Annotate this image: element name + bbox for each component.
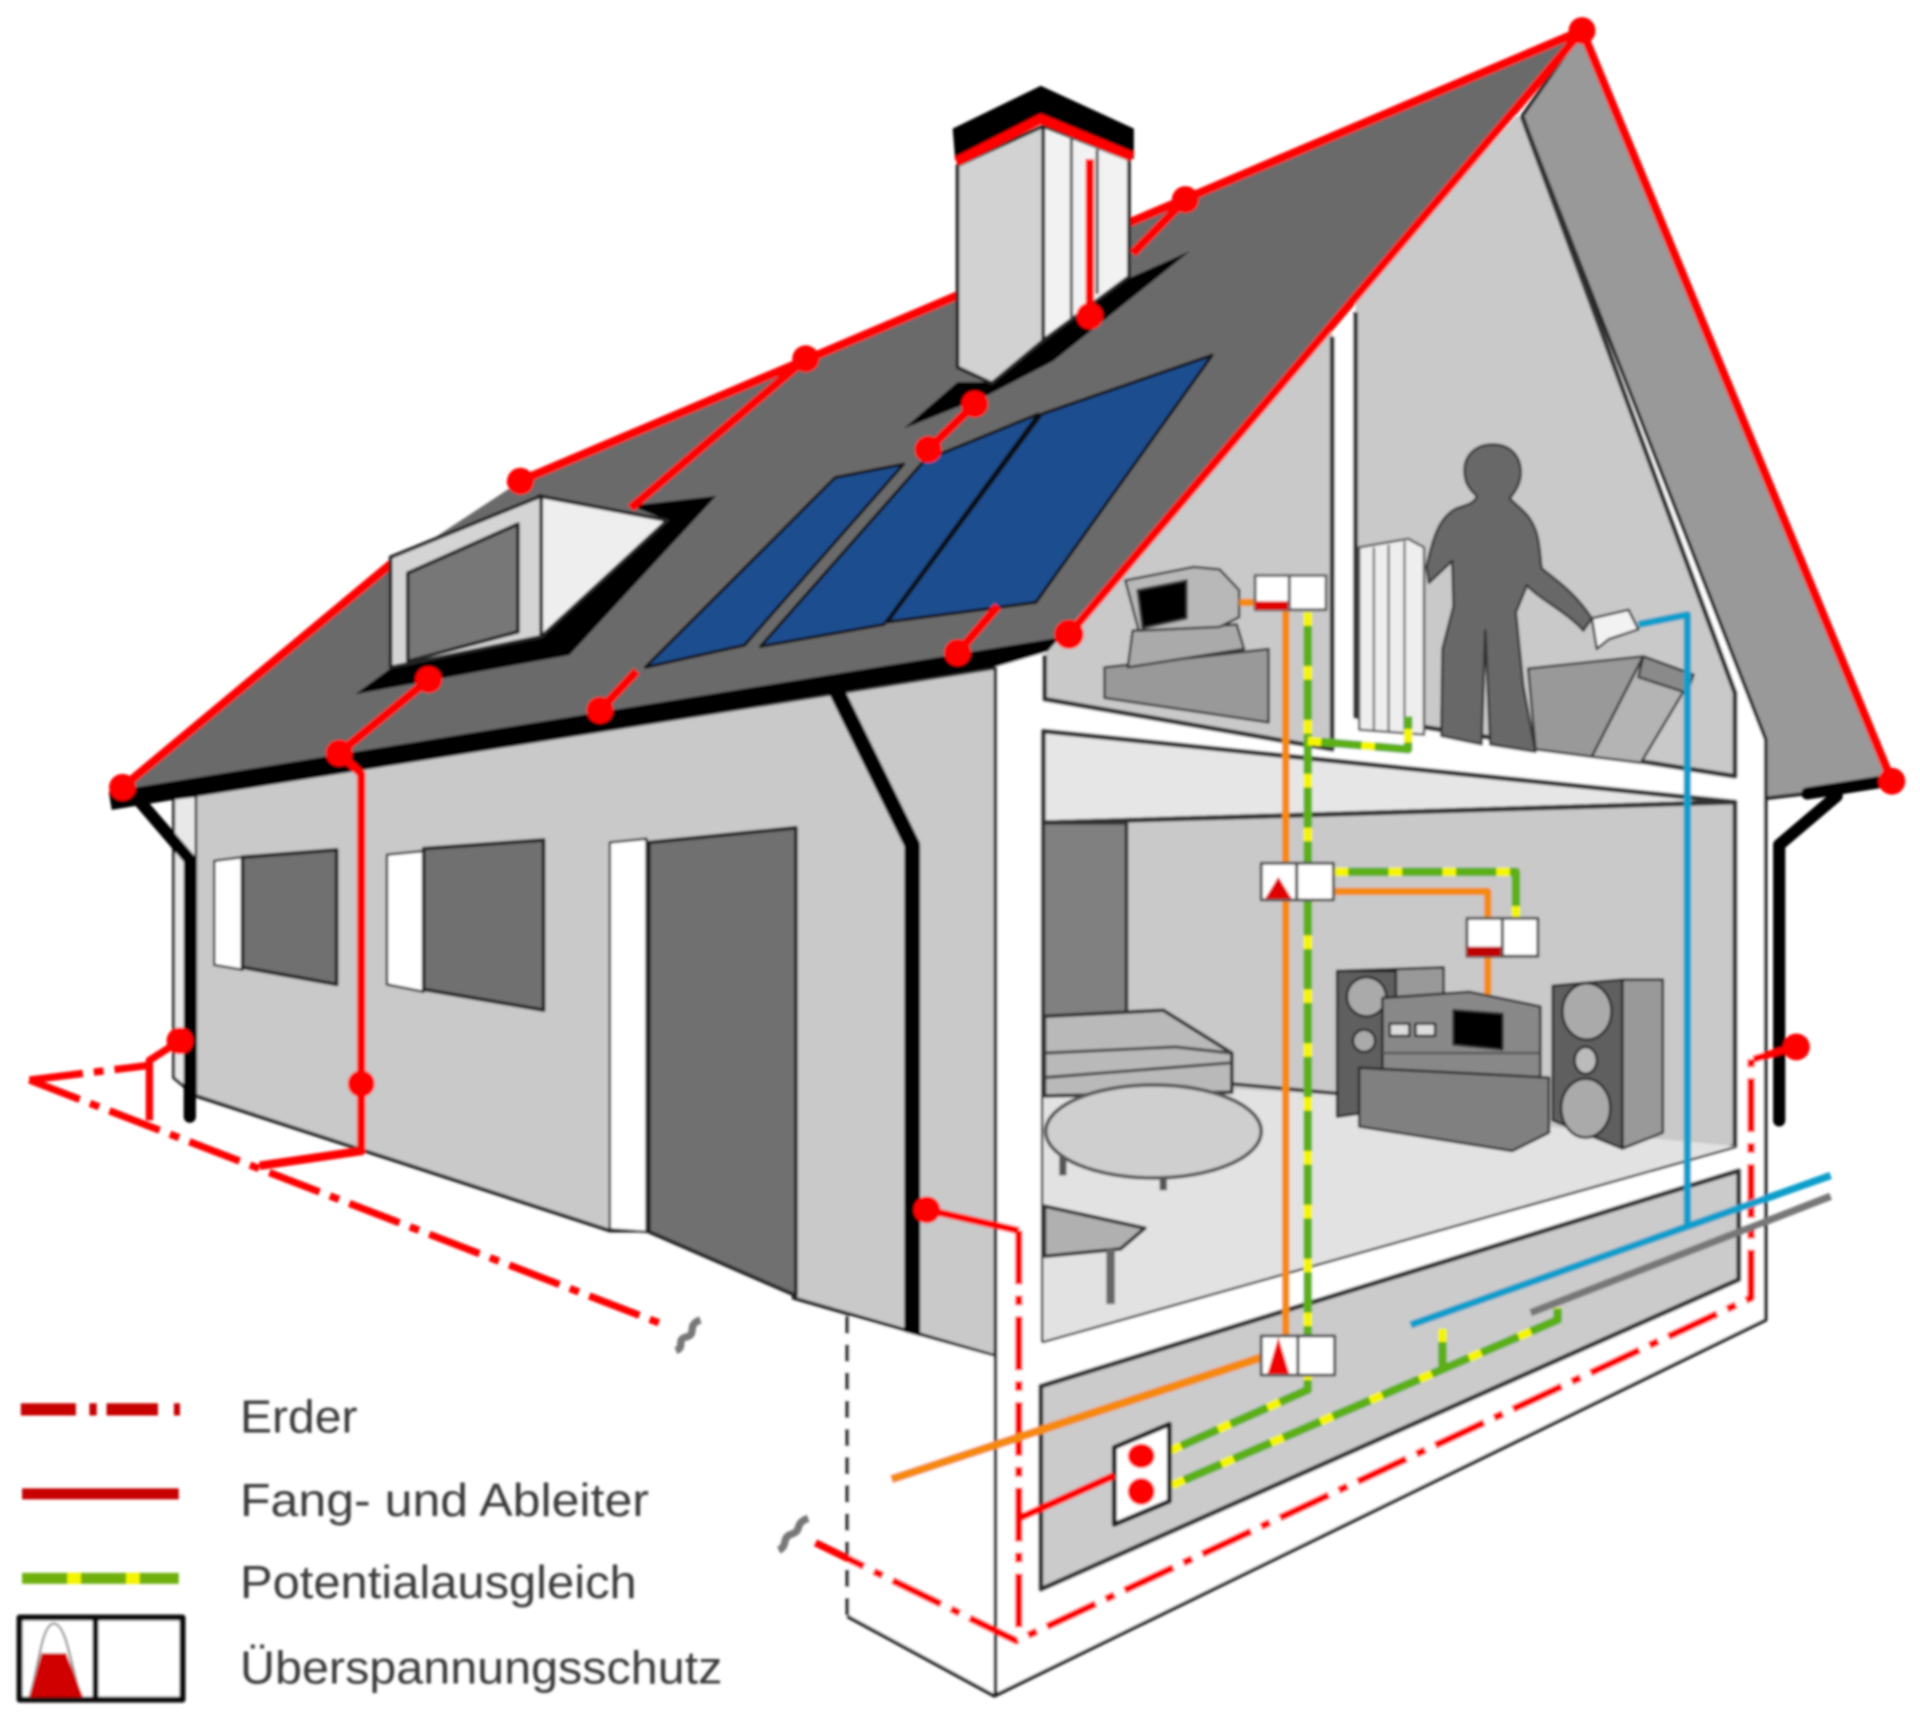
window middle — [387, 840, 544, 1010]
downpipe left — [137, 798, 190, 1117]
attic room left — [1044, 324, 1332, 749]
legend: Überspannungsschutz — [20, 1618, 722, 1700]
coffee table — [1046, 1085, 1261, 1190]
break symbols — [676, 1320, 808, 1550]
water pipe blue — [1411, 615, 1831, 1325]
living room — [1043, 802, 1735, 1341]
dashed foundation line — [846, 1316, 849, 1616]
surge protector basement — [1261, 1336, 1335, 1375]
air termination and down conductors — [149, 31, 1892, 1518]
roof eave — [110, 645, 1069, 801]
air termination ridge and hip lines — [122, 31, 1582, 787]
left speaker — [1337, 967, 1444, 1117]
equipotential bonding lines — [1169, 612, 1558, 1485]
ceiling — [1043, 731, 1735, 823]
exterior side wall — [174, 667, 998, 1357]
legend — [20, 1391, 722, 1700]
earthing conductor — [29, 1059, 1751, 1641]
sofa — [1044, 1010, 1232, 1096]
surge protector middle — [1261, 863, 1333, 900]
attic room right — [1356, 116, 1735, 776]
solar panels — [645, 355, 1212, 667]
bonding rail box — [1114, 1424, 1169, 1524]
surge protector right — [1467, 918, 1538, 956]
person silhouette — [1427, 444, 1592, 752]
bench — [1044, 1206, 1145, 1304]
gas pipe grey — [1531, 1196, 1831, 1313]
window left — [214, 850, 337, 984]
garage door — [610, 828, 796, 1296]
chimney — [904, 86, 1190, 429]
cutaway section wall — [847, 116, 1766, 1696]
table — [1528, 656, 1693, 763]
radiator — [1359, 539, 1424, 735]
stereo — [1359, 992, 1549, 1151]
connection points — [109, 17, 1905, 1223]
hand tap — [1592, 610, 1638, 649]
legend: Potentialausgleich: Potentialausgleich — [240, 1556, 637, 1608]
downpipe centre — [838, 693, 912, 1364]
legend: Fang- und Ableiter: Fang- und Ableiter — [240, 1474, 649, 1526]
basement — [1041, 1171, 1739, 1589]
surge protector upper — [1255, 576, 1326, 610]
surge line orange — [891, 602, 1488, 1479]
legend: Überspannungsschutz: Überspannungsschutz — [240, 1642, 722, 1694]
right eave and downpipe — [1779, 781, 1886, 1120]
dormer — [355, 496, 716, 694]
computer — [1104, 567, 1269, 722]
gable overhang — [1522, 31, 1892, 798]
legend: Erder: Erder — [240, 1391, 358, 1443]
roof surface — [122, 31, 1582, 802]
right speaker — [1553, 980, 1663, 1149]
